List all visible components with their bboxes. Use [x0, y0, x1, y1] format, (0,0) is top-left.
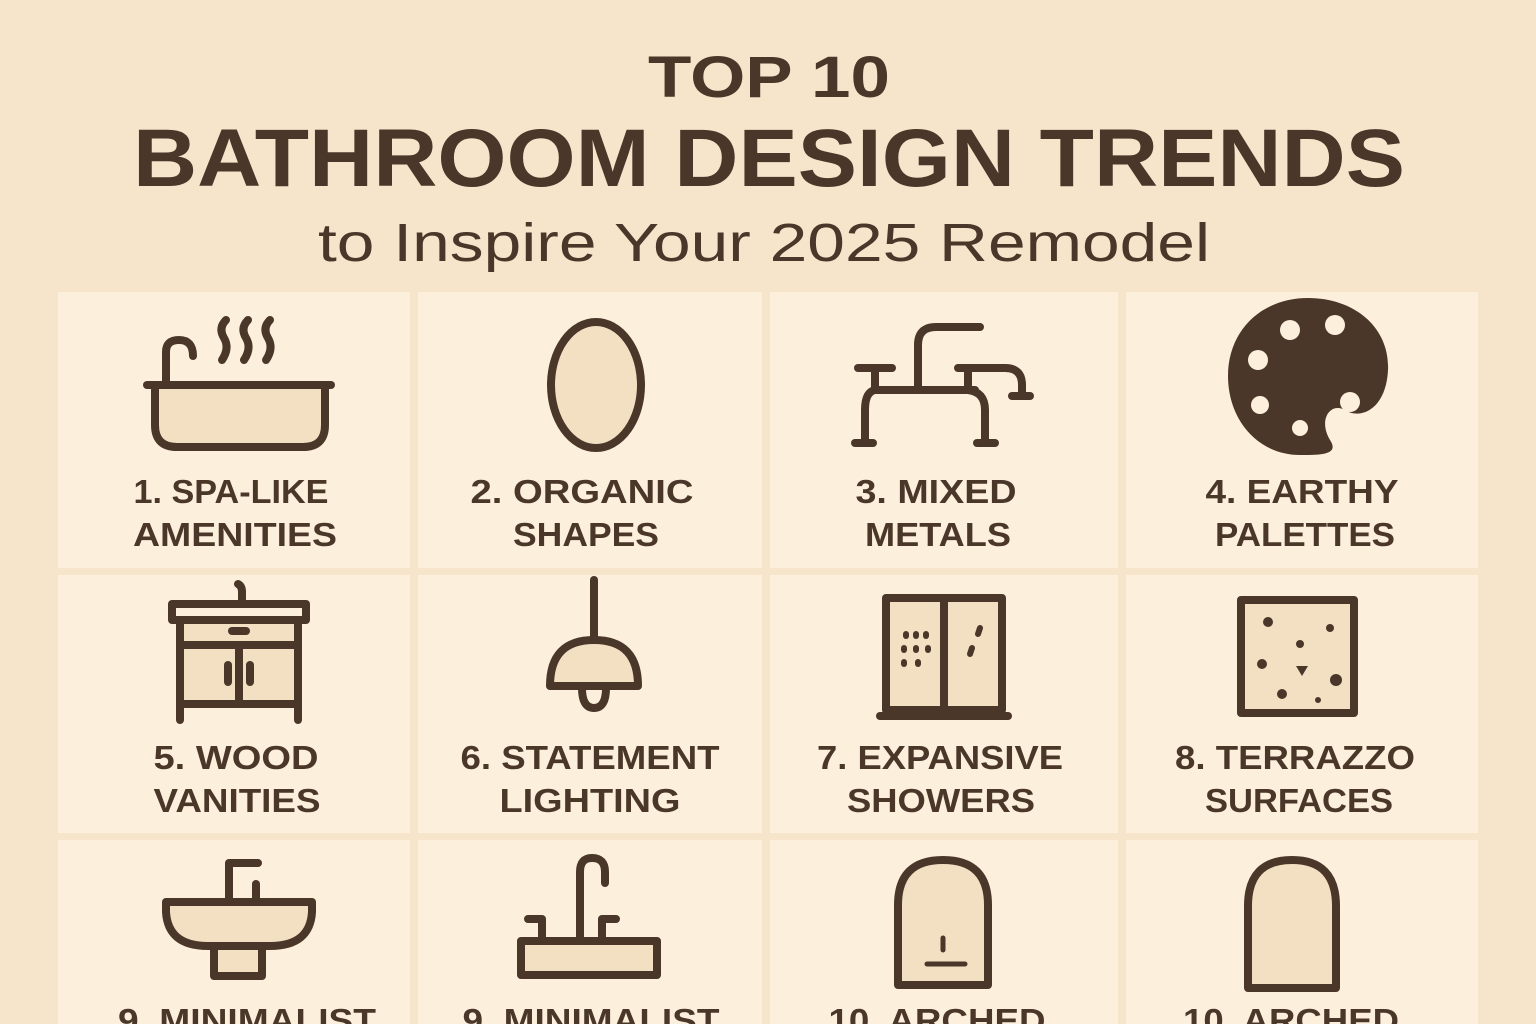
panel 1 label: 1. SPA-LIKE: [134, 473, 328, 510]
panel 7 label: 7. EXPANSIVE: [817, 739, 1063, 776]
panel 6 label: LIGHTING: [500, 782, 680, 819]
panel 3 label: METALS: [865, 516, 1011, 553]
panel 7 label: SHOWERS: [847, 782, 1035, 819]
panel 3 label: 3. MIXED: [856, 473, 1016, 510]
icon: pendant light: [550, 580, 638, 708]
panel 4 label: [1206, 473, 1398, 553]
panel 8 label: SURFACES: [1205, 782, 1393, 819]
title: BATHROOM DESIGN TRENDS: [133, 113, 1405, 204]
panel 5 label: 5. WOOD: [154, 739, 318, 776]
icon: mixed metals: [855, 327, 1030, 443]
panel 2 label: [470, 473, 694, 553]
icon: shower: [880, 598, 1008, 716]
panel 8 label: [1175, 739, 1415, 819]
panel 4 label: PALETTES: [1215, 516, 1395, 553]
panel 8 label: 8. TERRAZZO: [1175, 739, 1415, 776]
panel 1 label: [133, 473, 337, 553]
panel 4 label: 4. EARTHY: [1206, 473, 1398, 510]
title: TOP 10: [648, 45, 890, 110]
panel 3 label: [856, 473, 1016, 553]
icon: arched mirror: [1248, 860, 1336, 988]
panel 5 label: [154, 739, 320, 819]
panel 1 label: AMENITIES: [133, 516, 337, 553]
icon: oval mirror: [551, 322, 641, 448]
title: [133, 45, 1405, 273]
icon: arched mirror with shelf: [898, 860, 988, 985]
icon: vanity sink: [521, 858, 657, 975]
panel 6 label: 6. STATEMENT: [460, 739, 720, 776]
panel 2 label: 2. ORGANIC: [470, 473, 694, 510]
icon: pedestal sink: [166, 863, 312, 976]
title: to Inspire Your 2025 Remodel: [318, 213, 1210, 273]
grid of panels: [58, 292, 1478, 1024]
icon: bathtub: [147, 320, 331, 447]
panel 6 label: [460, 739, 720, 819]
panel 7 label: [817, 739, 1063, 819]
icon: terrazzo: [1241, 600, 1354, 713]
icon: palette: [1228, 298, 1388, 455]
icon: vanity: [172, 584, 306, 720]
panel 2 label: SHAPES: [513, 516, 659, 553]
panel 5 label: VANITIES: [154, 782, 320, 819]
